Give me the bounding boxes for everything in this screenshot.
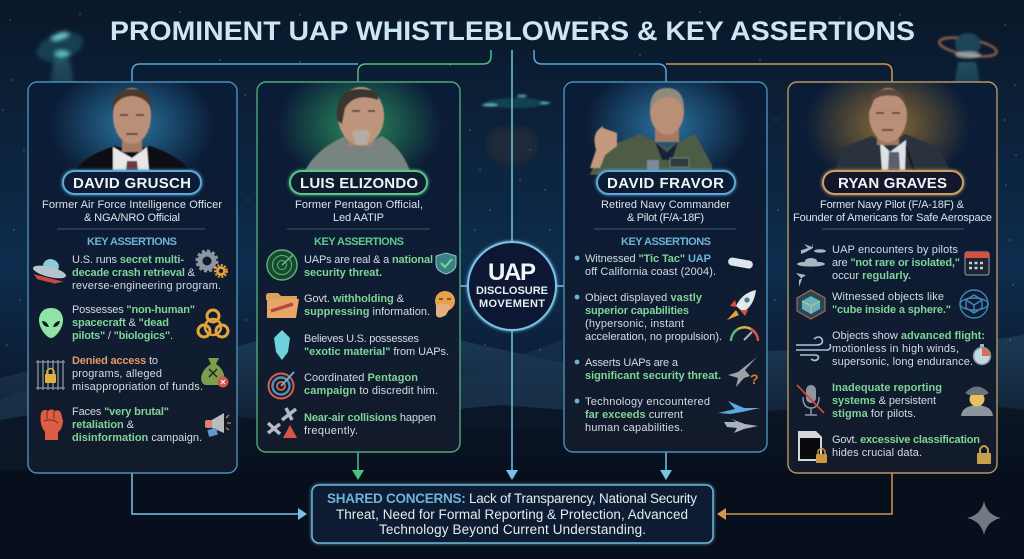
badge: UAP disclosure movement: UAP (488, 259, 536, 286)
assertion: advanced flight (832, 330, 985, 368)
icon: locked gate (36, 360, 65, 390)
assertion: denied access: Denied access to (72, 355, 158, 367)
icon: jets (718, 401, 760, 433)
assertion: crash retrieval: decade crash retrieval & (72, 267, 196, 279)
assertion: non-human spacecraft: pilots" / "biologics". (72, 330, 173, 342)
role: Ryan Graves (793, 199, 992, 224)
icon: biohazard (198, 310, 228, 337)
heading: key assertions: KEY ASSERTIONS (87, 236, 177, 248)
icon: crystal (274, 330, 290, 360)
assertion: superior capabilities: acceleration, no propulsion). (585, 331, 722, 343)
icon: rocket (727, 290, 756, 320)
role: David Fravor: Retired Navy Commander (601, 199, 730, 211)
role: Luis Elizondo: Former Pentagon Official, (295, 199, 423, 211)
assertion: security threat: Asserts UAPs are a (585, 357, 679, 369)
assertion: classification: hides crucial data. (832, 447, 922, 459)
connector: bottom arrows (132, 286, 892, 520)
assertion: reporting (832, 382, 942, 420)
assertion: advanced flight: motionless in high winds, (832, 343, 959, 355)
title: PROMINENT UAP WHISTLEBLOWERS & KEY ASSERTIONS (110, 16, 915, 46)
assertion: far exceeds (575, 396, 710, 434)
assertion: security threat (575, 357, 721, 382)
assertion: not rare (832, 244, 960, 282)
name pill: Ryan Graves (823, 171, 963, 194)
icon: muted microphone (797, 385, 824, 415)
heading: key assertions: KEY ASSERTIONS (621, 236, 711, 248)
icon: near collision planes (268, 408, 297, 438)
assertion: far exceeds: Technology encountered (585, 396, 710, 408)
assertion: far exceeds: far exceeds current (585, 409, 683, 421)
portrait: Luis Elizondo (284, 83, 436, 170)
assertion: reporting: systems & persistent (832, 395, 936, 407)
icon: radar (267, 250, 297, 280)
icon: UFO centre (482, 95, 550, 165)
role: David Fravor (601, 199, 730, 224)
assertion: pentagon campaign: Coordinated Pentagon (304, 372, 418, 384)
name pill: David Grusch: DAVID GRUSCH (73, 175, 191, 192)
assertion: denied access: misappropriation of funds. (72, 381, 203, 393)
role: Ryan Graves: Founder of Americans for Safe Aerospace (793, 212, 992, 224)
assertion: non-human spacecraft: spacecraft & "dead (72, 317, 169, 329)
panel: David Fravor (564, 63, 767, 452)
connector: top branches (132, 50, 892, 243)
badge: UAP disclosure movement: MOVEMENT (479, 298, 545, 310)
assertion: advanced flight: Objects show advanced flight: (832, 330, 985, 342)
panel: David Grusch (28, 63, 237, 473)
icon: fighter jet (728, 357, 759, 387)
assertion: cube in sphere (832, 291, 951, 316)
name pill: David Grusch (63, 171, 201, 194)
assertion: reporting: Inadequate reporting (832, 382, 942, 394)
assertion: pentagon campaign (304, 372, 438, 397)
assertion: tic tac (575, 253, 716, 278)
panel: Luis Elizondo (257, 63, 460, 452)
icon: UFO top right (938, 33, 998, 125)
name pill: Ryan Graves: RYAN GRAVES (838, 175, 947, 192)
role: David Grusch: & NGA/NRO Official (84, 212, 180, 224)
assertion: crash retrieval (72, 254, 221, 292)
assertion: not rare: occur regularly. (832, 270, 911, 282)
assertion: non-human spacecraft: Possesses "non-human" (72, 304, 195, 316)
assertion: cube in sphere: "cube inside a sphere." (832, 304, 951, 316)
icon: alien head (39, 308, 63, 338)
assertion: withholding: Govt. withholding & (304, 293, 405, 305)
assertion: exotic material: Believes U.S. possesses (304, 333, 420, 345)
assertion: crash retrieval: reverse-engineering program. (72, 280, 221, 292)
role: David Grusch (42, 199, 222, 224)
icon: pilot (961, 386, 993, 416)
assertion: far exceeds: human capabilities. (585, 422, 683, 434)
assertion: crash retrieval: U.S. runs secret multi- (72, 254, 184, 266)
role: Ryan Graves: Former Navy Pilot (F/A-18F) & (820, 199, 965, 211)
callout: shared concerns (312, 485, 713, 543)
icon: fist (40, 410, 63, 440)
assertion: reporting: stigma for pilots. (832, 408, 916, 420)
assertion: superior capabilities (575, 292, 722, 343)
assertion: cube in sphere: Witnessed objects like (832, 291, 944, 303)
callout: shared concerns: Technology Beyond Current Understanding. (379, 522, 646, 537)
portrait: Ryan Graves (812, 83, 965, 170)
icon: tic tac (727, 257, 753, 269)
icon: megaphone (205, 413, 231, 437)
assertion: retaliation (72, 406, 202, 444)
assertion: real threat (304, 254, 433, 279)
assertion: not rare: are "not rare or isolated," (832, 257, 960, 269)
icon: planes and saucer (795, 243, 826, 287)
icon: gears (197, 251, 227, 277)
assertion: denied access: programs, alleged (72, 368, 162, 380)
role: Luis Elizondo: Led AATIP (333, 212, 384, 224)
portrait: David Grusch (56, 83, 208, 170)
name pill: Luis Elizondo: LUIS ELIZONDO (300, 175, 418, 192)
icon: redacted document (798, 431, 827, 463)
assertion: not rare: UAP encounters by pilots (832, 244, 958, 256)
icon: hex cube (797, 290, 825, 319)
icon: wind (796, 337, 830, 360)
icon: cube in sphere (960, 290, 988, 318)
assertion: superior capabilities: (hypersonic, instant (585, 318, 684, 330)
name pill: David Fravor: DAVID FRAVOR (607, 175, 724, 192)
assertion: retaliation: disinformation campaign. (72, 432, 202, 444)
assertion: classification (832, 434, 980, 459)
panel: Ryan Graves (788, 63, 997, 473)
icon: target (268, 372, 294, 398)
heading: key assertions: KEY ASSERTIONS (314, 236, 404, 248)
icon: calendar (965, 252, 989, 275)
name pill: Luis Elizondo (290, 171, 427, 194)
assertion: near-air collisions: Near-air collisions happen (304, 412, 436, 424)
assertion: advanced flight: supersonic, long endurance. (832, 356, 973, 368)
icon: fighter jet: ? (750, 371, 759, 387)
icon: classified folder (266, 293, 299, 318)
role: David Grusch: Former Air Force Intelligence Officer (42, 199, 222, 211)
assertion: withholding (304, 293, 430, 318)
name pill: David Fravor (597, 171, 735, 194)
badge: UAP disclosure movement: DISCLOSURE (476, 285, 548, 297)
assertion: pentagon campaign: campaign to discredit him. (304, 385, 438, 397)
icon: crashed saucer (31, 255, 69, 286)
assertion: retaliation: retaliation & (72, 419, 135, 431)
callout: shared concerns: SHARED CONCERNS: Lack of Transparency, National Security (327, 491, 697, 506)
assertion: retaliation: Faces "very brutal" (72, 406, 169, 418)
icon: silenced face (435, 291, 455, 318)
assertion: near-air collisions (304, 412, 436, 437)
assertion: superior capabilities: Object displayed vastly (585, 292, 703, 304)
assertion: exotic material (304, 333, 449, 358)
role: Luis Elizondo (295, 199, 423, 224)
assertion: security threat: significant security threat. (585, 370, 721, 382)
icon: gauge (731, 327, 758, 341)
icon: UFO top left (33, 27, 87, 120)
icon: stopwatch (974, 344, 990, 364)
icon: sparkle watermark (967, 501, 1001, 535)
assertion: tic tac: off California coast (2004). (585, 266, 716, 278)
assertion: tic tac: Witnessed "Tic Tac" UAP (585, 253, 711, 265)
assertion: near-air collisions: frequently. (304, 425, 358, 437)
icon: gold lock (977, 446, 991, 464)
role: David Fravor: & Pilot (F/A-18F) (627, 212, 704, 224)
callout: shared concerns: Threat, Need for Formal Reporting & Protection, Advanced (336, 507, 688, 522)
assertion: denied access (72, 355, 203, 393)
assertion: superior capabilities: superior capabilities (585, 305, 689, 317)
assertion: real threat: UAPs are real & a national (304, 254, 433, 266)
assertion: withholding: suppressing information. (304, 306, 430, 318)
assertion: classification: Govt. excessive classification (832, 434, 980, 446)
badge: UAP disclosure movement (468, 242, 556, 330)
assertion: non-human spacecraft (72, 304, 195, 342)
icon: money bag (201, 358, 228, 388)
assertion: real threat: security threat. (304, 267, 382, 279)
portrait: David Fravor (590, 83, 742, 175)
assertion: exotic material: "exotic material" from UAPs. (304, 346, 449, 358)
icon: shield (436, 253, 456, 274)
